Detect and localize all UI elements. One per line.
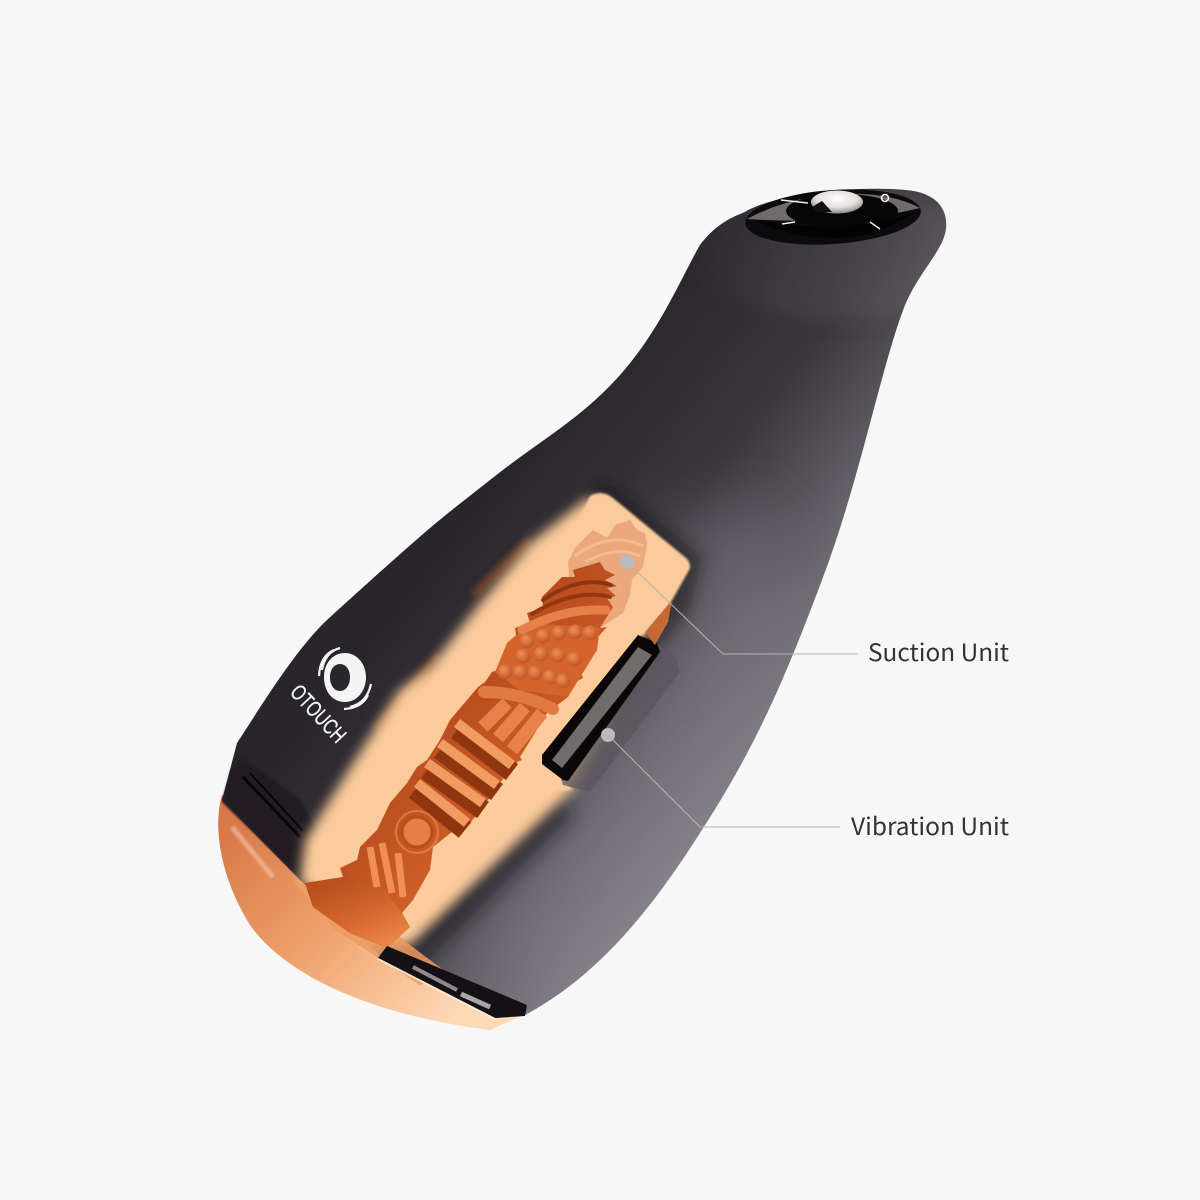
cutaway frame — [330, 483, 702, 830]
peach sharp corner — [500, 493, 690, 790]
callout: vibration unit: Vibration Unit — [851, 807, 1009, 842]
logo mark — [319, 648, 371, 709]
vibration unit — [542, 600, 680, 792]
infographic canvas — [218, 188, 1009, 1030]
bottom vents band — [378, 946, 527, 1019]
device body — [222, 180, 990, 1018]
collar — [222, 758, 328, 878]
soft end cap — [218, 795, 526, 1030]
top ridges — [484, 582, 611, 709]
upper rods — [483, 703, 542, 750]
diagonal ribs — [370, 843, 403, 897]
product illustration — [218, 180, 990, 1030]
rung texture — [415, 723, 512, 830]
circular boss — [402, 817, 432, 847]
dots panel colour — [495, 623, 600, 697]
peach cutaway — [300, 496, 660, 950]
logo wordmark: OTOUCH — [285, 680, 351, 748]
control cap — [743, 184, 923, 250]
inner texture — [305, 520, 647, 948]
base flange — [305, 877, 410, 948]
main orange texture — [305, 562, 617, 948]
pale far section — [568, 520, 647, 628]
bump texture — [498, 624, 598, 688]
metal dial — [811, 190, 863, 214]
brand logo — [285, 648, 371, 748]
cap highlight strip — [232, 827, 273, 877]
callout: vibration unit — [601, 728, 1009, 842]
dark band beside the lower cutaway — [395, 800, 560, 965]
callout: suction unit: Suction Unit — [868, 633, 1009, 668]
window colour at the opening — [300, 884, 450, 985]
orange liner glimpses — [375, 540, 530, 730]
callout: suction unit — [620, 555, 1009, 668]
